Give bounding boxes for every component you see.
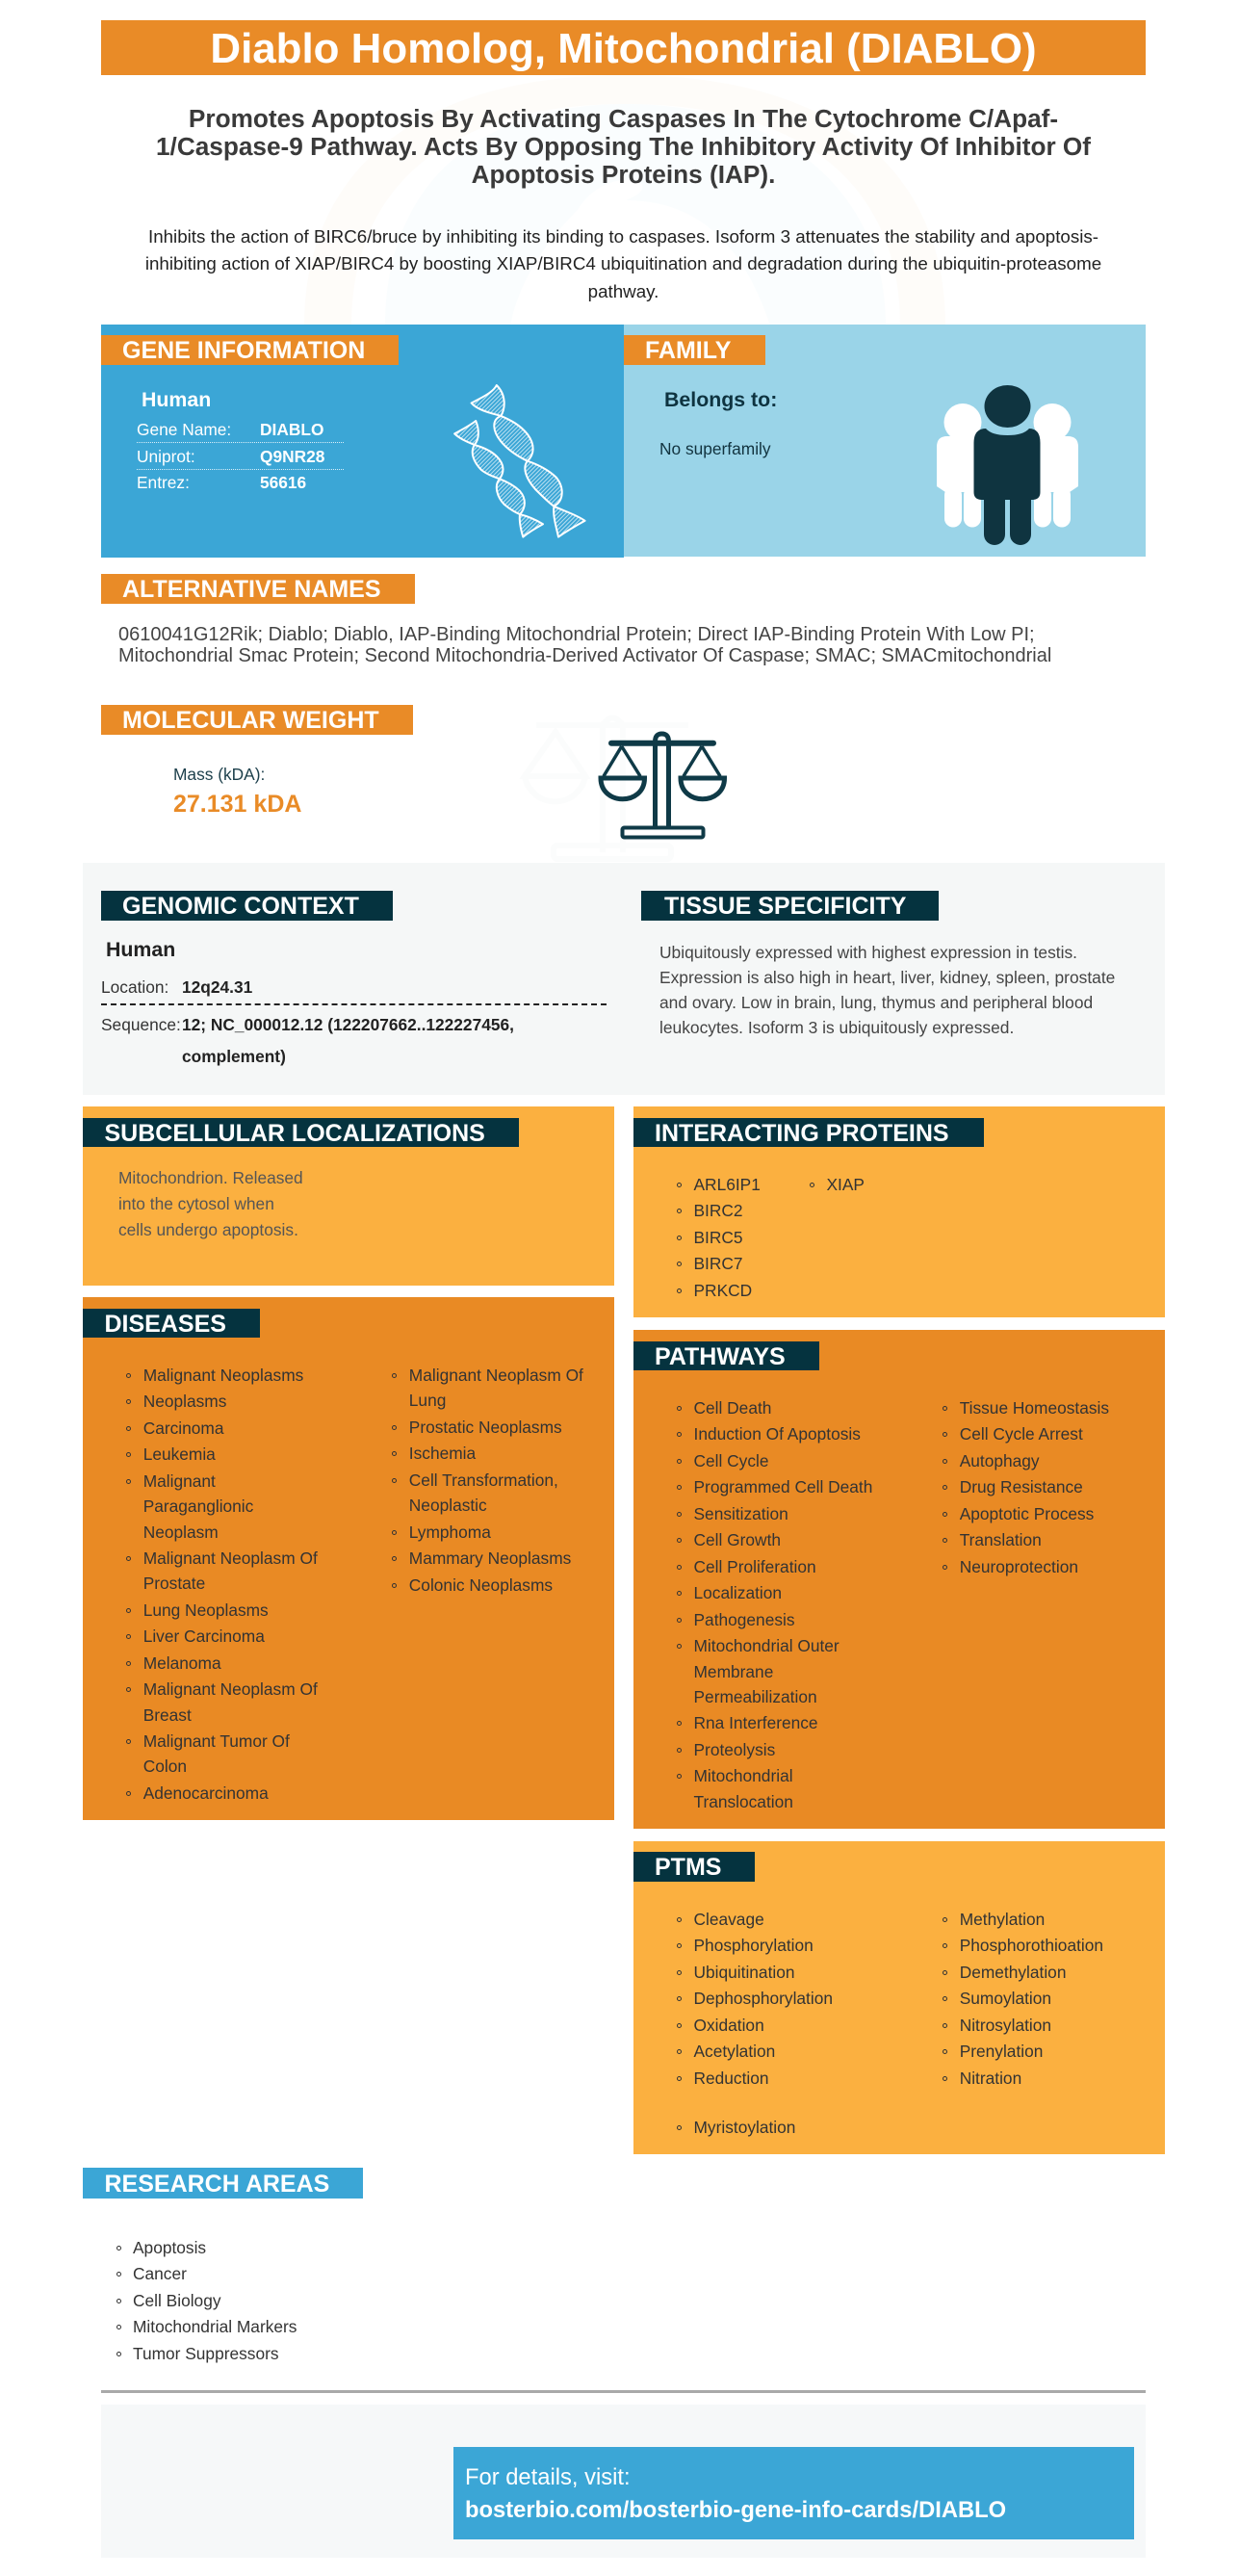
heading: subcellular localizations: SUBCELLULAR LOCALIZATIONS bbox=[104, 1120, 485, 1147]
research areas list: Cell Biology bbox=[133, 2291, 221, 2310]
diseases list column 1: Liver Carcinoma bbox=[143, 1626, 265, 1646]
subtitle heading bbox=[156, 104, 1092, 189]
diseases list column 1: Breast bbox=[143, 1705, 192, 1725]
pathways list column 1: Translocation bbox=[693, 1792, 793, 1811]
tissue specificity text: leukocytes. Isoform 3 is ubiquitously expressed. bbox=[659, 1018, 1014, 1037]
uniprot row: Uniprot: bbox=[137, 447, 195, 466]
pathways list column 1: Programmed Cell Death bbox=[693, 1477, 872, 1496]
location row bbox=[101, 977, 252, 997]
description paragraph: pathway. bbox=[588, 281, 659, 301]
diseases list column 2: Ischemia bbox=[409, 1444, 476, 1463]
diseases list column 1: Malignant Neoplasms bbox=[143, 1366, 303, 1385]
diseases list column 2: Cell Transformation, bbox=[409, 1470, 558, 1490]
pathways list column 1: Induction Of Apoptosis bbox=[693, 1424, 861, 1444]
pathways list column 2: Drug Resistance bbox=[960, 1477, 1083, 1496]
entrez row: Entrez: bbox=[137, 473, 190, 492]
gene name row: Gene Name: bbox=[137, 420, 231, 439]
localization text bbox=[118, 1168, 303, 1239]
diseases list column 1: Paraganglionic bbox=[143, 1496, 253, 1516]
pathways list column 1: Permeabilization bbox=[693, 1687, 817, 1706]
description paragraph bbox=[145, 225, 1101, 301]
gene name row: DIABLO bbox=[260, 420, 323, 439]
icon: faint balance scale watermark bbox=[515, 708, 708, 863]
description paragraph: Inhibits the action of BIRC6/bruce by inhibiting its binding to caspases. Isoform 3 attenuates the stability and apoptosis- bbox=[148, 225, 1098, 247]
pathways list column 2: Neuroprotection bbox=[960, 1557, 1078, 1576]
species label: Human bbox=[142, 388, 211, 411]
panel: genomic context and tissue specificity bbox=[83, 863, 1165, 1094]
pathways list column 1: Mitochondrial bbox=[693, 1766, 793, 1785]
research areas list: Tumor Suppressors bbox=[133, 2344, 279, 2363]
link text: bosterbio.com/bosterbio-gene-info-cards/DIABLO bbox=[465, 2496, 1006, 2523]
title banner bbox=[101, 20, 1146, 75]
PTMs list column 2: Sumoylation bbox=[960, 1989, 1051, 2008]
PTMs list column 2: Methylation bbox=[960, 1910, 1045, 1929]
mass value: 27.131 kDA bbox=[173, 791, 301, 818]
interacting proteins list column 1: ARL6IP1 bbox=[693, 1175, 761, 1194]
panel: interacting proteins bbox=[633, 1106, 1165, 1317]
PTMs list column 2: Phosphorothioation bbox=[960, 1936, 1103, 1955]
heading: interacting proteins: INTERACTING PROTEINS bbox=[655, 1120, 949, 1147]
heading: alternative names: ALTERNATIVE NAMES bbox=[122, 576, 381, 603]
tissue specificity text: and ovary. Low in brain, lung, thymus and peripheral blood bbox=[659, 993, 1093, 1012]
diseases list column 1: Malignant bbox=[143, 1471, 216, 1491]
uniprot row: Q9NR28 bbox=[260, 447, 324, 466]
pathways list column 1: Cell Growth bbox=[693, 1530, 781, 1549]
heading: pathways bbox=[633, 1341, 819, 1370]
pathways list column 2: Autophagy bbox=[960, 1451, 1040, 1470]
PTMs list column 1: Oxidation bbox=[693, 2016, 764, 2035]
pathways list column 1: Mitochondrial Outer bbox=[693, 1636, 840, 1655]
pathways list column 1 bbox=[677, 1398, 872, 1811]
dashed divider bbox=[101, 1003, 607, 1005]
diseases list column 2: Lung bbox=[409, 1391, 446, 1410]
description paragraph: inhibiting action of XIAP/BIRC4 by boosting XIAP/BIRC4 ubiquitination and degradation during the ubiquitin-proteasome bbox=[145, 253, 1101, 273]
diseases list column 2: Prostatic Neoplasms bbox=[409, 1418, 562, 1437]
pathways list column 2: Translation bbox=[960, 1530, 1042, 1549]
PTMs list column 2: Prenylation bbox=[960, 2042, 1043, 2061]
heading: genomic context: GENOMIC CONTEXT bbox=[122, 893, 359, 920]
pathways list column 2: Cell Cycle Arrest bbox=[960, 1424, 1083, 1444]
diseases list column 1: Carcinoma bbox=[143, 1418, 223, 1438]
PTMs list column 2 bbox=[943, 1910, 1103, 2088]
pathways list column 1: Cell Death bbox=[693, 1398, 771, 1418]
diseases list column 1: Malignant Neoplasm Of bbox=[143, 1548, 318, 1568]
tissue specificity text bbox=[659, 943, 1115, 1037]
diseases list column 2 bbox=[392, 1366, 583, 1595]
diseases list column 1: Leukemia bbox=[143, 1444, 216, 1464]
research areas list: Apoptosis bbox=[133, 2238, 206, 2257]
diseases list column 1: Colon bbox=[143, 1756, 187, 1776]
heading: PTMs bbox=[633, 1852, 755, 1882]
sequence row bbox=[101, 1015, 514, 1066]
uniprot row bbox=[137, 445, 344, 470]
diseases list column 1: Prostate bbox=[143, 1574, 205, 1593]
diseases list column 1: Malignant Neoplasm Of bbox=[143, 1679, 318, 1699]
interacting proteins list column 1: BIRC7 bbox=[693, 1254, 743, 1273]
PTMs list column 2: Demethylation bbox=[960, 1963, 1066, 1982]
heading: family bbox=[624, 335, 764, 365]
PTMs list column 1: Myristoylation bbox=[693, 2118, 795, 2137]
PTMs list column 1: Dephosphorylation bbox=[693, 1989, 833, 2008]
panel: genomic context and tissue specificity: 12q24.31 bbox=[182, 977, 252, 997]
pathways list column 1: Localization bbox=[693, 1583, 782, 1602]
entrez row: 56616 bbox=[260, 473, 306, 492]
diseases list column 1: Melanoma bbox=[143, 1653, 221, 1673]
interacting proteins list column 1 bbox=[677, 1175, 761, 1300]
mass label: Mass (kDA): bbox=[173, 765, 265, 784]
panel: genomic context and tissue specificity: complement) bbox=[182, 1047, 286, 1066]
diseases list column 1: Neoplasm bbox=[143, 1522, 219, 1542]
research areas list bbox=[116, 2238, 297, 2363]
interacting proteins list column 1: PRKCD bbox=[693, 1281, 752, 1300]
pathways list column 2 bbox=[943, 1398, 1109, 1576]
heading: diseases bbox=[83, 1309, 260, 1338]
localization text: into the cytosol when bbox=[118, 1194, 274, 1213]
subtitle heading: Promotes Apoptosis By Activating Caspases In The Cytochrome C/Apaf- bbox=[189, 104, 1058, 133]
panel: subcellular localizations bbox=[83, 1106, 614, 1285]
panel: diseases bbox=[83, 1297, 614, 1820]
alternative names text bbox=[118, 624, 1051, 666]
PTMs list column 1: Phosphorylation bbox=[693, 1936, 814, 1955]
interacting proteins list column 1: BIRC5 bbox=[693, 1228, 743, 1247]
pathways list column 1: Membrane bbox=[693, 1662, 773, 1681]
localization text: Mitochondrion. Released bbox=[118, 1168, 303, 1187]
background watermark: arches behind header text bbox=[289, 75, 963, 325]
heading: research areas: RESEARCH AREAS bbox=[104, 2171, 329, 2198]
pathways list column 1: Cell Proliferation bbox=[693, 1557, 816, 1576]
pathways list column 1: Sensitization bbox=[693, 1504, 788, 1523]
heading: diseases: DISEASES bbox=[104, 1311, 226, 1338]
PTMs list column 1: Acetylation bbox=[693, 2042, 775, 2061]
callout: details link bbox=[453, 2447, 1134, 2539]
pathways list column 2: Apoptotic Process bbox=[960, 1504, 1094, 1523]
heading: tissue specificity: TISSUE SPECIFICITY bbox=[664, 893, 906, 920]
heading: pathways: PATHWAYS bbox=[655, 1343, 786, 1370]
heading: PTMs: PTMS bbox=[655, 1854, 721, 1881]
tissue specificity text: Ubiquitously expressed with highest expression in testis. bbox=[659, 943, 1077, 962]
panel: family bbox=[624, 325, 1146, 557]
PTMs list column 1: Cleavage bbox=[693, 1910, 764, 1929]
diseases list column 1 bbox=[126, 1366, 318, 1803]
pathways list column 1: Rna Interference bbox=[693, 1713, 818, 1732]
pathways list column 2: Tissue Homeostasis bbox=[960, 1398, 1109, 1418]
genomic species label: Human bbox=[106, 938, 175, 961]
diseases list column 2: Lymphoma bbox=[409, 1522, 491, 1542]
research areas list: Cancer bbox=[133, 2264, 187, 2283]
diseases list column 1: Lung Neoplasms bbox=[143, 1600, 269, 1620]
icon: group of people bbox=[937, 385, 1078, 545]
diseases list column 2: Mammary Neoplasms bbox=[409, 1548, 571, 1568]
PTMs list column 1: Reduction bbox=[693, 2069, 769, 2088]
localization text: cells undergo apoptosis. bbox=[118, 1220, 298, 1239]
title banner: Diablo Homolog, Mitochondrial (DIABLO) bbox=[210, 25, 1037, 72]
panel: gene information bbox=[101, 325, 624, 558]
tissue specificity text: Expression is also high in heart, liver, kidney, spleen, prostate bbox=[659, 968, 1115, 987]
panel: genomic context and tissue specificity: 12; NC_000012.12 (122207662..122227456, bbox=[182, 1015, 514, 1034]
interacting proteins list column 2: XIAP bbox=[826, 1175, 865, 1194]
subtitle heading: Apoptosis Proteins (IAP). bbox=[472, 160, 775, 189]
heading: family: FAMILY bbox=[645, 337, 731, 364]
family text: No superfamily bbox=[659, 439, 771, 458]
alternative names text: 0610041G12Rik; Diablo; Diablo, IAP-Binding Mitochondrial Protein; Direct IAP-Binding Protein With Low PI; bbox=[118, 624, 1035, 645]
call to action text: For details, visit: bbox=[465, 2463, 631, 2490]
icon: balance scale bbox=[599, 732, 727, 840]
diseases list column 1: Adenocarcinoma bbox=[143, 1783, 269, 1803]
gene name row bbox=[137, 419, 344, 443]
PTMs list column 2: Nitrosylation bbox=[960, 2016, 1051, 2035]
panel: pathways bbox=[633, 1330, 1165, 1829]
belongs to label: Belongs to: bbox=[664, 388, 777, 411]
entrez row bbox=[137, 473, 306, 492]
diseases list column 2: Colonic Neoplasms bbox=[409, 1575, 553, 1595]
pathways list column 1: Pathogenesis bbox=[693, 1610, 795, 1629]
panel: PTMs bbox=[633, 1841, 1165, 2154]
subtitle heading: 1/Caspase-9 Pathway. Acts By Opposing The Inhibitory Activity Of Inhibitor Of bbox=[156, 132, 1091, 161]
PTMs list column 1: Ubiquitination bbox=[693, 1963, 795, 1982]
location row: Location: bbox=[101, 977, 168, 997]
diseases list column 2: Malignant Neoplasm Of bbox=[409, 1366, 583, 1385]
panel: footer bbox=[101, 2405, 1146, 2558]
alternative names text: Mitochondrial Smac Protein; Second Mitochondria-Derived Activator Of Caspase; SMAC; SMACmitochondrial bbox=[118, 645, 1051, 666]
diseases list column 2: Neoplastic bbox=[409, 1496, 487, 1515]
PTMs list column 1 bbox=[677, 1910, 833, 2137]
pathways list column 1: Cell Cycle bbox=[693, 1451, 768, 1470]
heading: gene information: GENE INFORMATION bbox=[122, 337, 365, 364]
icon: DNA double helix bbox=[453, 384, 586, 538]
pathways list column 1: Proteolysis bbox=[693, 1740, 775, 1759]
research areas list: Mitochondrial Markers bbox=[133, 2317, 297, 2336]
diseases list column 1: Malignant Tumor Of bbox=[143, 1731, 290, 1751]
interacting proteins list column 1: BIRC2 bbox=[693, 1201, 743, 1220]
diseases list column 1: Neoplasms bbox=[143, 1392, 226, 1411]
PTMs list column 2: Nitration bbox=[960, 2069, 1021, 2088]
sequence row: Sequence: bbox=[101, 1015, 181, 1034]
heading: molecular weight: MOLECULAR WEIGHT bbox=[122, 707, 379, 734]
